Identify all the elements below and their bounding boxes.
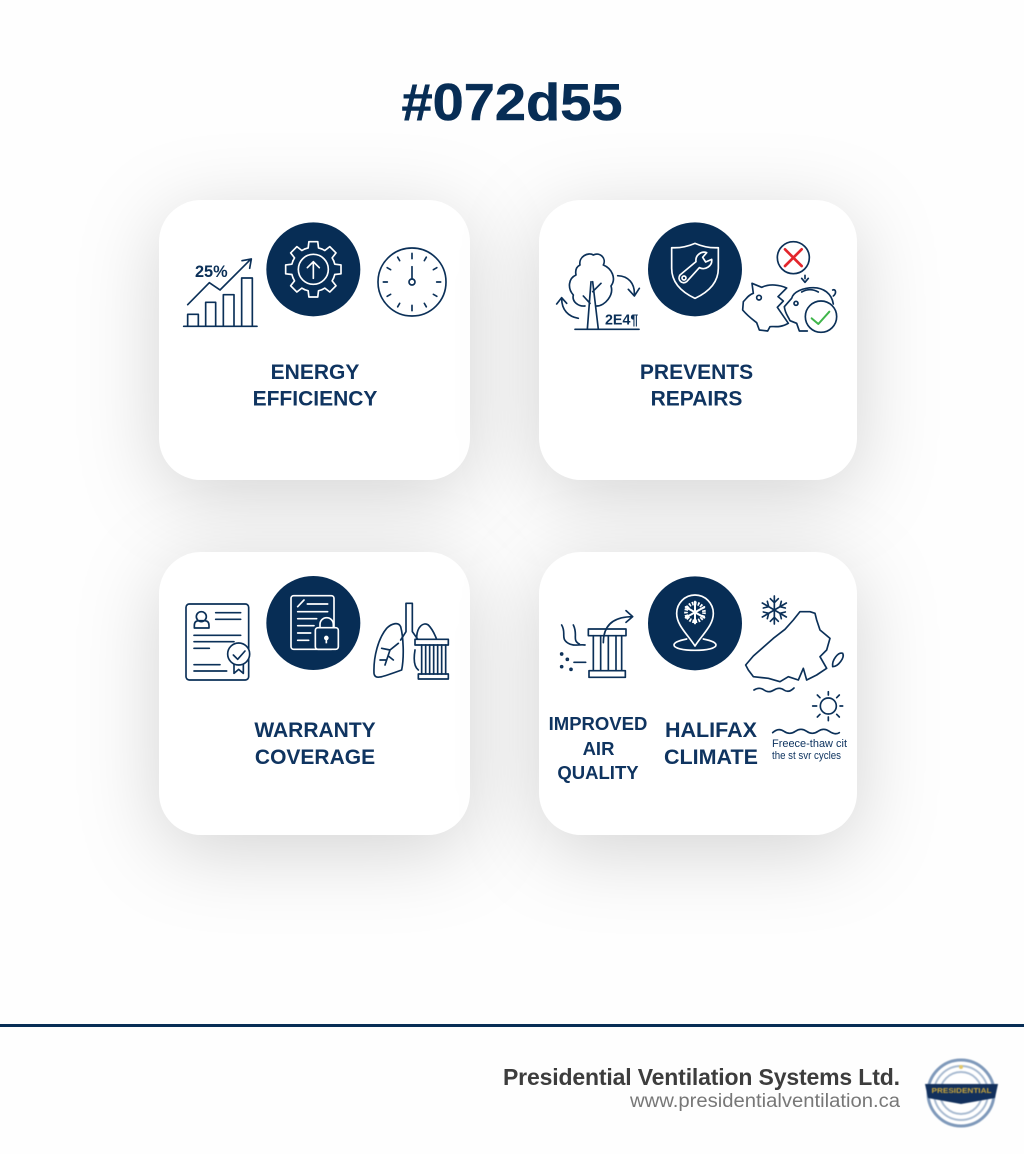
icon: growth bar chart: 25% <box>195 262 228 281</box>
icon: sun and wave <box>773 692 843 734</box>
text: freeze-thaw caption: Freece-thaw cit <box>772 738 847 750</box>
label: halifax climate: HALIFAX <box>665 718 758 742</box>
footer company name: Presidential Ventilation Systems Ltd. <box>503 1064 900 1090</box>
icon: tree lifecycle <box>557 254 639 329</box>
label: energy efficiency: EFFICIENCY <box>253 388 377 410</box>
label: warranty coverage: WARRANTY <box>254 719 376 742</box>
panel: energy efficiency <box>159 200 470 480</box>
panel: prevents repairs <box>539 200 857 480</box>
text: freeze-thaw caption <box>772 738 847 762</box>
label: energy efficiency: ENERGY <box>271 361 359 384</box>
label: improved air quality: QUALITY <box>557 762 639 783</box>
icon: broken piggy bank <box>743 275 836 331</box>
icon: lungs and filter <box>374 603 448 679</box>
icon: locked document <box>266 576 360 670</box>
label: warranty coverage: COVERAGE <box>255 746 375 769</box>
label: improved air quality: AIR <box>583 738 614 759</box>
icon: warranty certificate <box>186 604 250 680</box>
icon: tree lifecycle: 2E4¶ <box>605 313 638 329</box>
label: prevents repairs: REPAIRS <box>651 388 742 410</box>
label: halifax climate: CLIMATE <box>664 745 758 769</box>
icon: growth bar chart <box>184 259 257 326</box>
logo badge <box>925 1060 998 1126</box>
icon: Nova Scotia map <box>746 612 843 692</box>
title: #072d55 <box>402 74 622 132</box>
label: improved air quality: IMPROVED <box>549 713 647 734</box>
icon: approved savings <box>805 301 837 332</box>
footer website: www.presidentialventilation.ca <box>629 1091 900 1112</box>
icon: shield with wrench <box>648 222 742 316</box>
icon: rejected cost <box>777 242 809 274</box>
panel: warranty coverage <box>159 552 470 835</box>
text: freeze-thaw caption: the st svr cycles <box>772 750 841 762</box>
icon: gear with up arrow <box>266 222 360 316</box>
icon: location pin with snowflake <box>648 576 742 670</box>
panel: air quality and climate <box>539 552 857 835</box>
icon: snowflake <box>762 596 786 624</box>
label: prevents repairs: PREVENTS <box>640 361 753 384</box>
icon: air filter with airflow <box>561 611 633 677</box>
footer rule <box>0 1024 1024 1027</box>
logo badge: PRESIDENTIAL <box>932 1086 992 1095</box>
icon: gauge dial <box>378 248 446 316</box>
